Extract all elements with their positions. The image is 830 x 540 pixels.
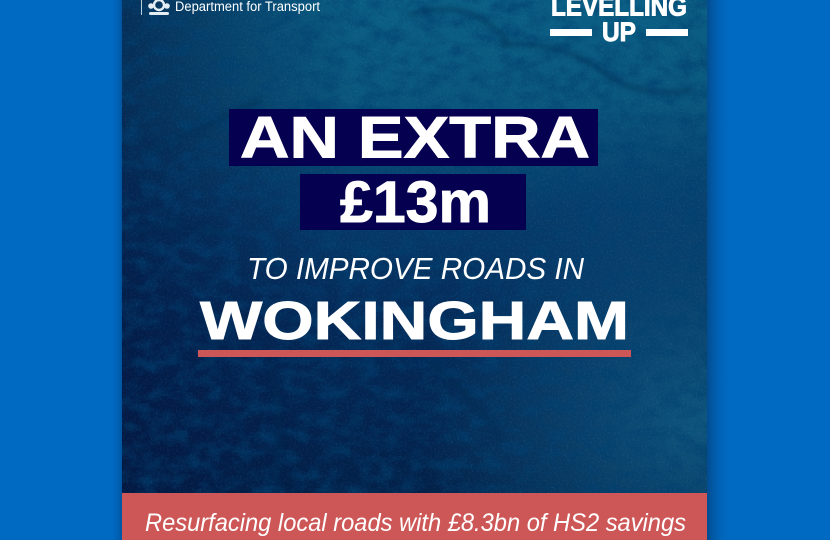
- footer banner: Resurfacing local roads with £8.3bn of HS2 savings: [145, 509, 686, 537]
- footer banner: [122, 493, 707, 540]
- heading box: £13m: £13m: [340, 170, 491, 235]
- icon: royal crest: [148, 0, 170, 15]
- underline: [198, 350, 631, 357]
- logo: Levelling Up: [550, 0, 688, 47]
- panel: road texture: [122, 0, 707, 494]
- heading box: £13m: [300, 170, 526, 235]
- heading box: An extra: AN EXTRA: [240, 106, 590, 170]
- place name: WOKINGHAM: [200, 291, 629, 351]
- logo: Levelling Up: UP: [602, 17, 636, 47]
- subheading: TO IMPROVE ROADS IN: [247, 251, 585, 286]
- side shadows: [110, 0, 731, 540]
